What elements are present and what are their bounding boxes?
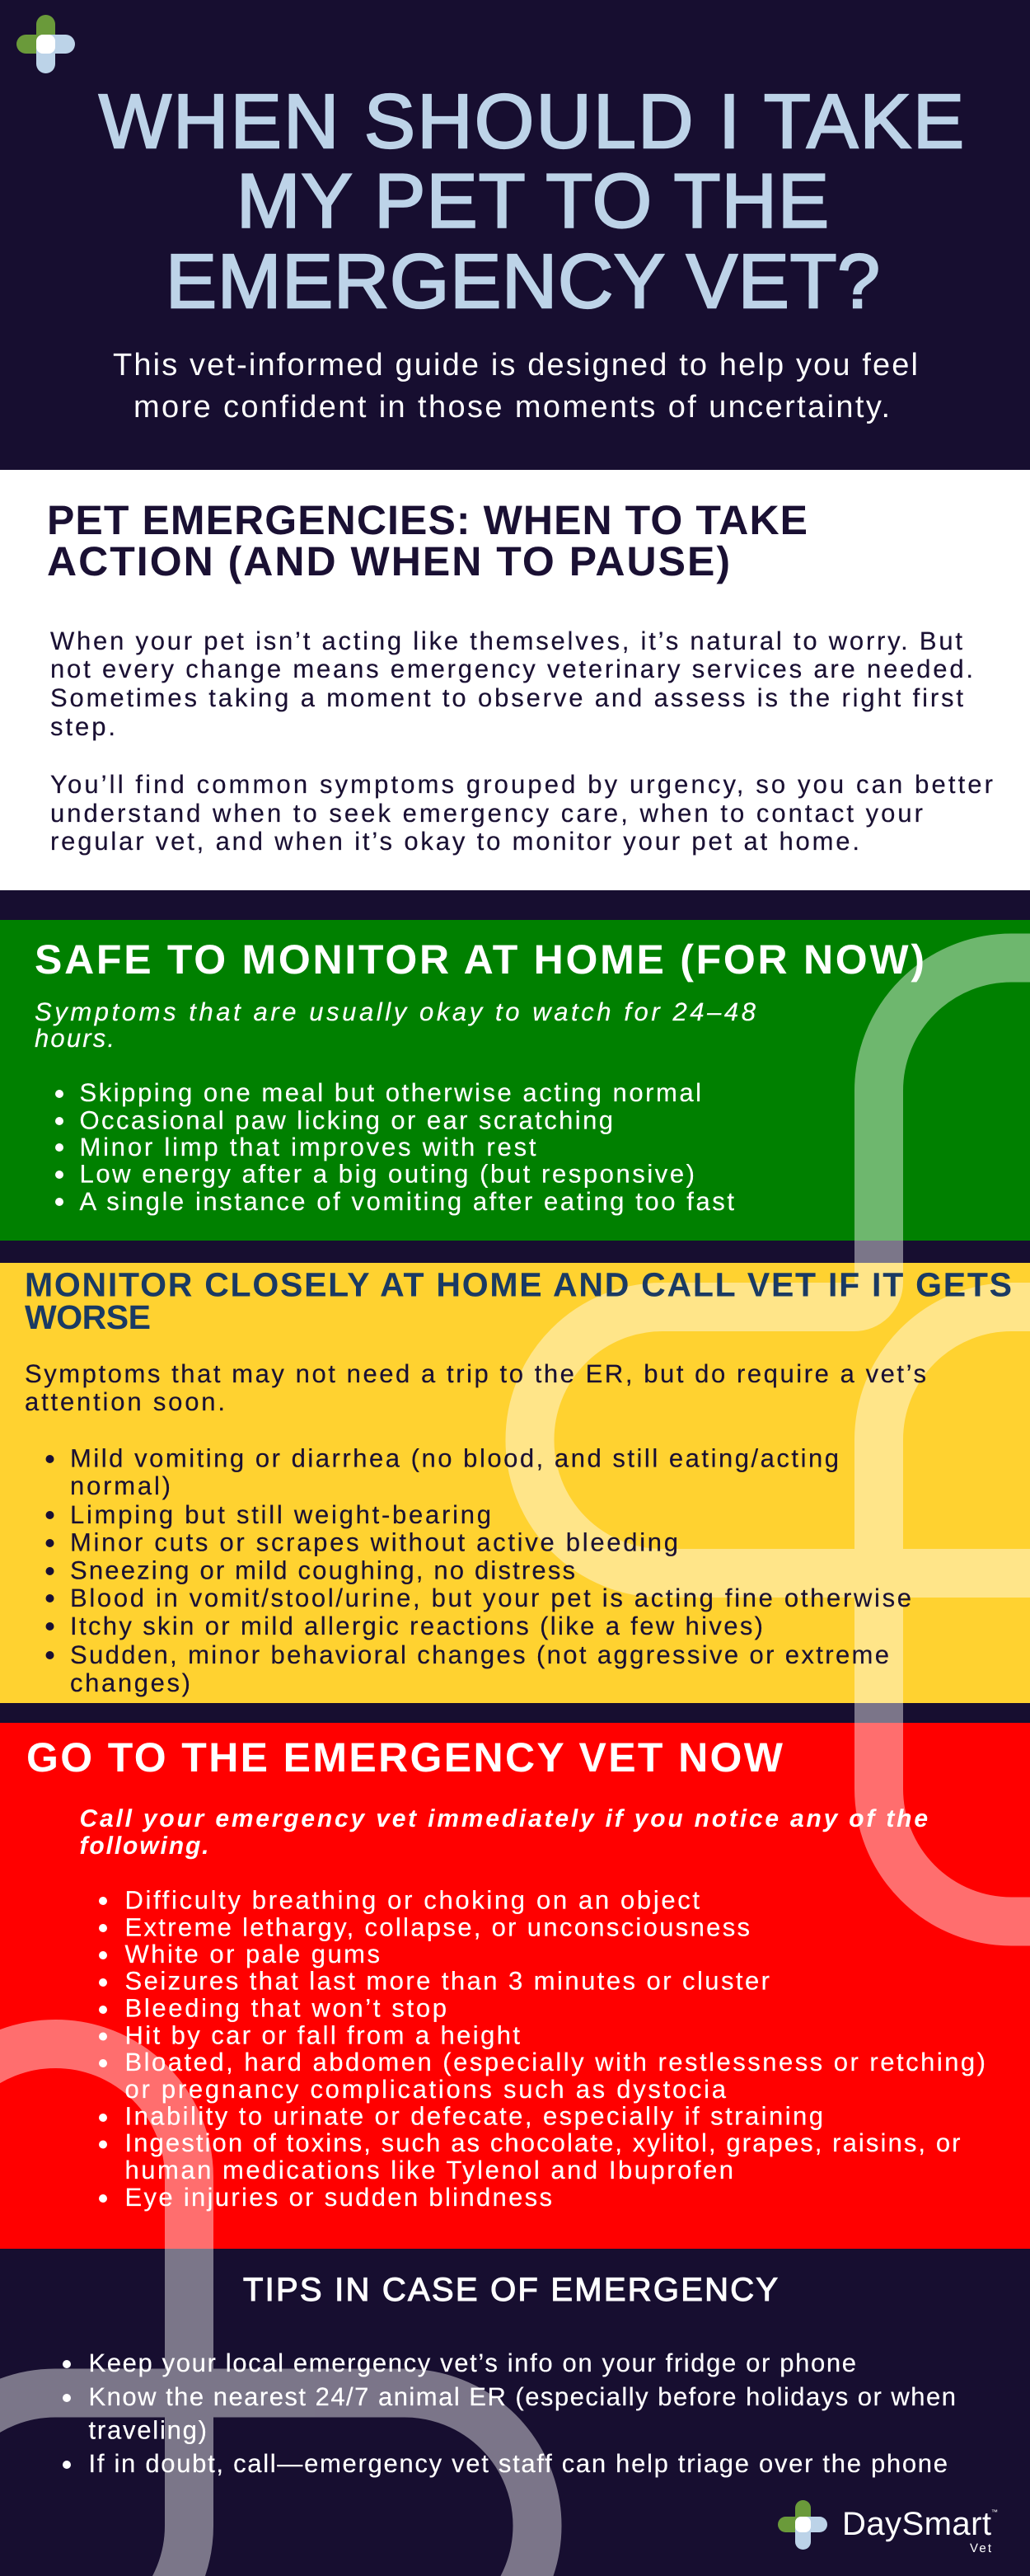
list: emergency symptoms: Difficulty breathing or choking on an object: [125, 1886, 700, 1914]
list: safe symptoms: Low energy after a big outing (but responsive): [79, 1159, 695, 1189]
list: emergency symptoms: Ingestion of toxins, such as chocolate, xylitol, grapes, raisins, or: [125, 2128, 961, 2157]
list: tips: Know the nearest 24/7 animal ER (especially before holidays or when: [89, 2382, 956, 2411]
panel: safe to monitor content: [35, 936, 925, 1216]
heading: monitor closely: MONITOR CLOSELY AT HOME AND CALL VET IF IT GETS: [25, 1266, 1012, 1304]
list: monitor symptoms: normal): [70, 1471, 171, 1500]
icon: DaySmart Vet logo: ™: [991, 2508, 998, 2516]
text block: safe intro: Symptoms that are usually okay to watch for 24–48: [35, 997, 756, 1026]
text block: intro paragraph two: regular vet, and when it’s okay to monitor your pet at home.: [50, 827, 859, 856]
list: emergency symptoms: or pregnancy complications such as dystocia: [125, 2075, 727, 2104]
decorative plus outlines: [0, 958, 1030, 2576]
text block: intro paragraph two: You’ll find common symptoms grouped by urgency, so you can better: [50, 770, 993, 799]
list: emergency symptoms: [99, 1886, 986, 2212]
list: monitor symptoms: Blood in vomit/stool/urine, but your pet is acting fine otherwise: [70, 1584, 911, 1612]
panel: safe to monitor background: [0, 920, 1030, 1241]
heading: monitor closely: WORSE: [25, 1298, 151, 1336]
list: monitor symptoms: Limping but still weight-bearing: [70, 1500, 491, 1529]
panel: monitor closely content: [25, 1266, 1012, 1697]
text block: emergency intro: [79, 1805, 928, 1860]
panel: monitor closely background: [0, 1263, 1030, 1703]
list: safe symptoms: A single instance of vomiting after eating too fast: [79, 1187, 734, 1216]
list: monitor symptoms: Sudden, minor behavioral changes (not aggressive or extreme: [70, 1640, 889, 1669]
title: EMERGENCY VET?: [166, 238, 880, 324]
list: tips: traveling): [89, 2415, 207, 2445]
list: safe symptoms: [55, 1078, 734, 1216]
list: safe symptoms: Occasional paw licking or ear scratching: [79, 1106, 613, 1134]
subtitle: This vet-informed guide is designed to help you feel: [113, 348, 918, 382]
title: WHEN SHOULD I TAKE: [99, 78, 964, 164]
list: tips: Keep your local emergency vet’s info on your fridge or phone: [89, 2348, 856, 2377]
list: emergency symptoms: White or pale gums: [125, 1940, 380, 1968]
list: emergency symptoms: Bleeding that won’t stop: [125, 1993, 447, 2023]
list: tips: [63, 2348, 956, 2478]
heading: pet emergencies: [47, 497, 808, 584]
title: [99, 78, 964, 324]
list: monitor symptoms: Minor cuts or scrapes without active bleeding: [70, 1528, 678, 1556]
list: emergency symptoms: Hit by car or fall from a height: [125, 2021, 520, 2049]
icon: DaySmart Vet logo: DaySmart: [842, 2506, 991, 2542]
text block: safe intro: [35, 997, 756, 1053]
text block: safe intro: hours.: [35, 1024, 115, 1053]
text block: intro paragraph one: step.: [50, 712, 115, 741]
text block: intro paragraph one: When your pet isn’t acting like themselves, it’s natural to worry. But: [50, 626, 962, 655]
text block: intro paragraph two: [50, 770, 993, 856]
text block: monitor intro: [25, 1359, 926, 1416]
icon: DaySmart Vet logo: [778, 2500, 998, 2555]
list: emergency symptoms: Extreme lethargy, collapse, or unconsciousness: [125, 1912, 750, 1942]
panel: emergency background: [0, 1723, 1030, 2249]
list: emergency symptoms: Inability to urinate or defecate, especially if straining: [125, 2102, 823, 2130]
list: safe symptoms: Skipping one meal but otherwise acting normal: [79, 1078, 701, 1107]
subtitle: [113, 348, 918, 425]
list: monitor symptoms: Mild vomiting or diarrhea (no blood, and still eating/acting: [70, 1444, 839, 1472]
icon: top logo cross: [16, 15, 75, 73]
heading: monitor closely: [25, 1266, 1012, 1336]
panel: intro content: [47, 497, 993, 856]
list: emergency symptoms: Eye injuries or sudden blindness: [125, 2183, 552, 2212]
list: safe symptoms: Minor limp that improves with rest: [79, 1133, 536, 1161]
text block: monitor intro: Symptoms that may not need a trip to the ER, but do require a vet’s: [25, 1359, 926, 1388]
heading: pet emergencies: ACTION (AND WHEN TO PAUSE): [47, 538, 730, 584]
text block: emergency intro: following.: [79, 1832, 209, 1860]
title: MY PET TO THE: [236, 158, 829, 244]
text block: emergency intro: Call your emergency vet immediately if you notice any of the: [79, 1805, 928, 1832]
list: emergency symptoms: human medications like Tylenol and Ibuprofen: [125, 2156, 733, 2184]
subtitle: more confident in those moments of uncertainty.: [133, 390, 890, 425]
text block: intro paragraph one: Sometimes taking a moment to observe and assess is the right first: [50, 683, 963, 712]
list: monitor symptoms: changes): [70, 1668, 190, 1697]
heading: safe to monitor: SAFE TO MONITOR AT HOME (FOR NOW): [35, 936, 925, 983]
icon: DaySmart Vet logo: Vet: [970, 2541, 992, 2555]
list: monitor symptoms: Itchy skin or mild allergic reactions (like a few hives): [70, 1612, 763, 1640]
heading: pet emergencies: PET EMERGENCIES: WHEN TO TAKE: [47, 497, 808, 543]
list: emergency symptoms: Seizures that last more than 3 minutes or cluster: [125, 1967, 770, 1995]
list: emergency symptoms: Bloated, hard abdomen (especially with restlessness or retching): [125, 2048, 986, 2076]
text block: monitor intro: attention soon.: [25, 1387, 225, 1416]
text block: intro paragraph one: not every change means emergency veterinary services are needed.: [50, 655, 973, 683]
text block: intro paragraph one: [50, 626, 973, 741]
panel: emergency content: [26, 1734, 986, 2212]
panel: tips content: [63, 2272, 956, 2478]
list: monitor symptoms: [46, 1444, 911, 1697]
heading: go to the emergency vet: GO TO THE EMERGENCY VET NOW: [26, 1734, 784, 1781]
list: monitor symptoms: Sneezing or mild coughing, no distress: [70, 1556, 575, 1584]
text block: intro paragraph two: understand when to seek emergency care, when to contact your: [50, 799, 923, 828]
list: tips: If in doubt, call—emergency vet staff can help triage over the phone: [89, 2449, 948, 2478]
heading: tips in case of emergency: TIPS IN CASE OF EMERGENCY: [243, 2272, 778, 2308]
panel: intro background: [0, 470, 1030, 890]
